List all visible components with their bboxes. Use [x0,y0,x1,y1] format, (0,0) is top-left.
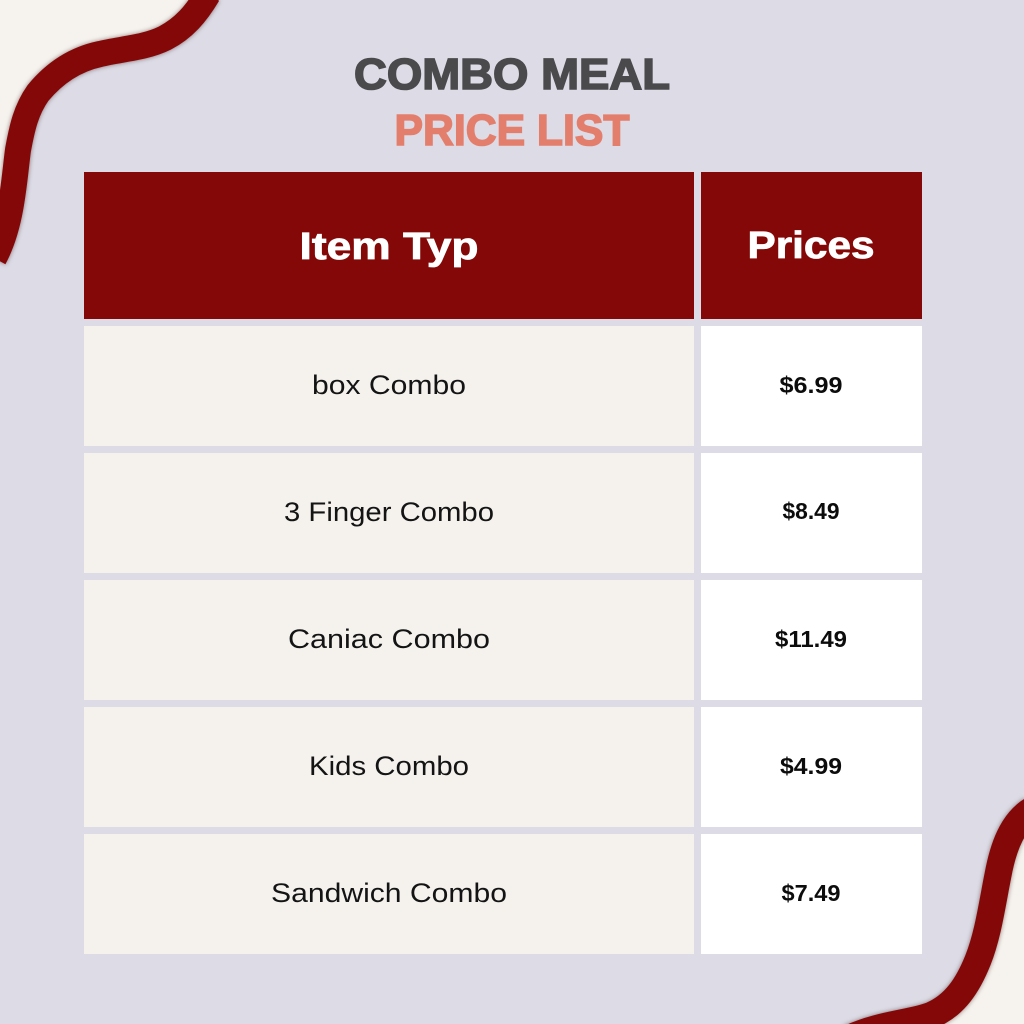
table header row [84,172,922,319]
header cell: prices [701,172,922,319]
row: sandwich combo: Sandwich Combo [271,878,507,908]
row: box combo [84,326,922,446]
decoration: top-left corner wave [0,0,208,258]
row: box combo: box Combo [312,370,466,400]
title [354,50,670,155]
title line: combo meal: COMBO MEAL [354,50,670,99]
row: kids combo: $4.99 [780,753,842,779]
row: box combo: $6.99 [780,372,842,398]
header cell: item type [84,172,694,319]
row: sandwich combo: $7.49 [782,880,840,906]
row: caniac combo: $11.49 [775,626,847,652]
row: caniac combo: Caniac Combo [288,624,490,654]
row: caniac combo [84,580,922,700]
title line: price list: PRICE LIST [394,106,630,155]
row: sandwich combo [84,834,922,954]
row: kids combo: Kids Combo [309,751,469,781]
row: 3 finger combo: 3 Finger Combo [284,497,494,527]
price table [84,172,922,954]
row: 3 finger combo [84,453,922,573]
header cell: prices: Prices [748,225,874,267]
row: 3 finger combo: $8.49 [782,498,840,524]
row: kids combo [84,707,922,827]
decoration: bottom-right corner wave [850,810,1024,1024]
header cell: item type: Item Typ [300,226,478,268]
